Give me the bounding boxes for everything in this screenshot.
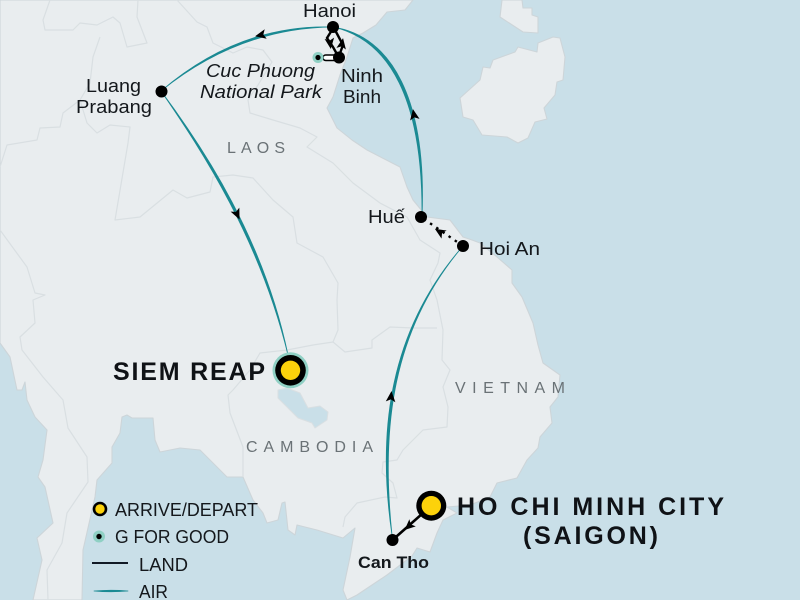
stop: Luang Prabang: Prabang — [76, 96, 152, 117]
lake: Tonle Sap — [278, 388, 328, 428]
mainland southeast asia — [0, 0, 560, 600]
stop: Hue — [368, 206, 427, 227]
land route: Ho Chi Minh City to Can Tho — [392, 506, 431, 540]
stop: Can Tho — [358, 534, 429, 572]
stop: Cuc Phuong National Park: Cuc Phuong — [206, 60, 316, 81]
peninsula: Leizhou — [500, 0, 538, 33]
country label: Cambodia: CAMBODIA — [246, 439, 373, 456]
legend item: land: LAND — [139, 554, 188, 575]
stop: Cuc Phuong National Park: National Park — [200, 81, 324, 102]
stop: Hue: Huế — [368, 206, 406, 227]
air route: Hue to Hanoi — [333, 27, 422, 217]
stop: Can Tho: Can Tho — [358, 554, 429, 572]
stop: Ninh Binh: Binh — [343, 86, 381, 107]
land route: Hoi An to Hue — [421, 217, 463, 246]
stop: Siem Reap — [113, 352, 308, 388]
stop: Ninh Binh — [333, 52, 383, 107]
stop: Luang Prabang: Luang — [86, 75, 141, 96]
stop: Ho Chi Minh City: HO CHI MINH CITY — [457, 493, 724, 521]
country label: Laos: LAOS — [227, 140, 285, 157]
island: Hainan — [460, 37, 565, 143]
stop: Siem Reap: SIEM REAP — [113, 358, 265, 386]
stop: Hoi An — [457, 238, 540, 259]
legend item: land — [92, 554, 188, 575]
air route: Can Tho to Hoi An — [386, 246, 463, 535]
stop: Hoi An: Hoi An — [479, 238, 540, 259]
land route: Hanoi and Ninh Binh loop — [323, 30, 343, 60]
legend item: G for Good: G FOR GOOD — [115, 526, 229, 547]
air route: Luang Prabang to Siem Reap — [161, 91, 288, 355]
air route: Hanoi to Luang Prabang — [161, 27, 333, 91]
direction arrows — [231, 29, 447, 534]
legend — [92, 499, 258, 600]
legend item: arrive/depart: ARRIVE/DEPART — [115, 499, 258, 520]
stop: Ho Chi Minh City — [416, 491, 724, 550]
stop: Luang Prabang — [76, 75, 168, 117]
stop: Hanoi — [303, 0, 356, 33]
stop: Ninh Binh: Ninh — [341, 65, 383, 86]
stop: Ho Chi Minh City: (SAIGON) — [523, 522, 658, 550]
stop: Cuc Phuong National Park — [200, 52, 324, 102]
country label: Vietnam: VIETNAM — [455, 380, 565, 397]
stop: Hanoi: Hanoi — [303, 0, 356, 21]
legend item: air — [94, 581, 168, 600]
